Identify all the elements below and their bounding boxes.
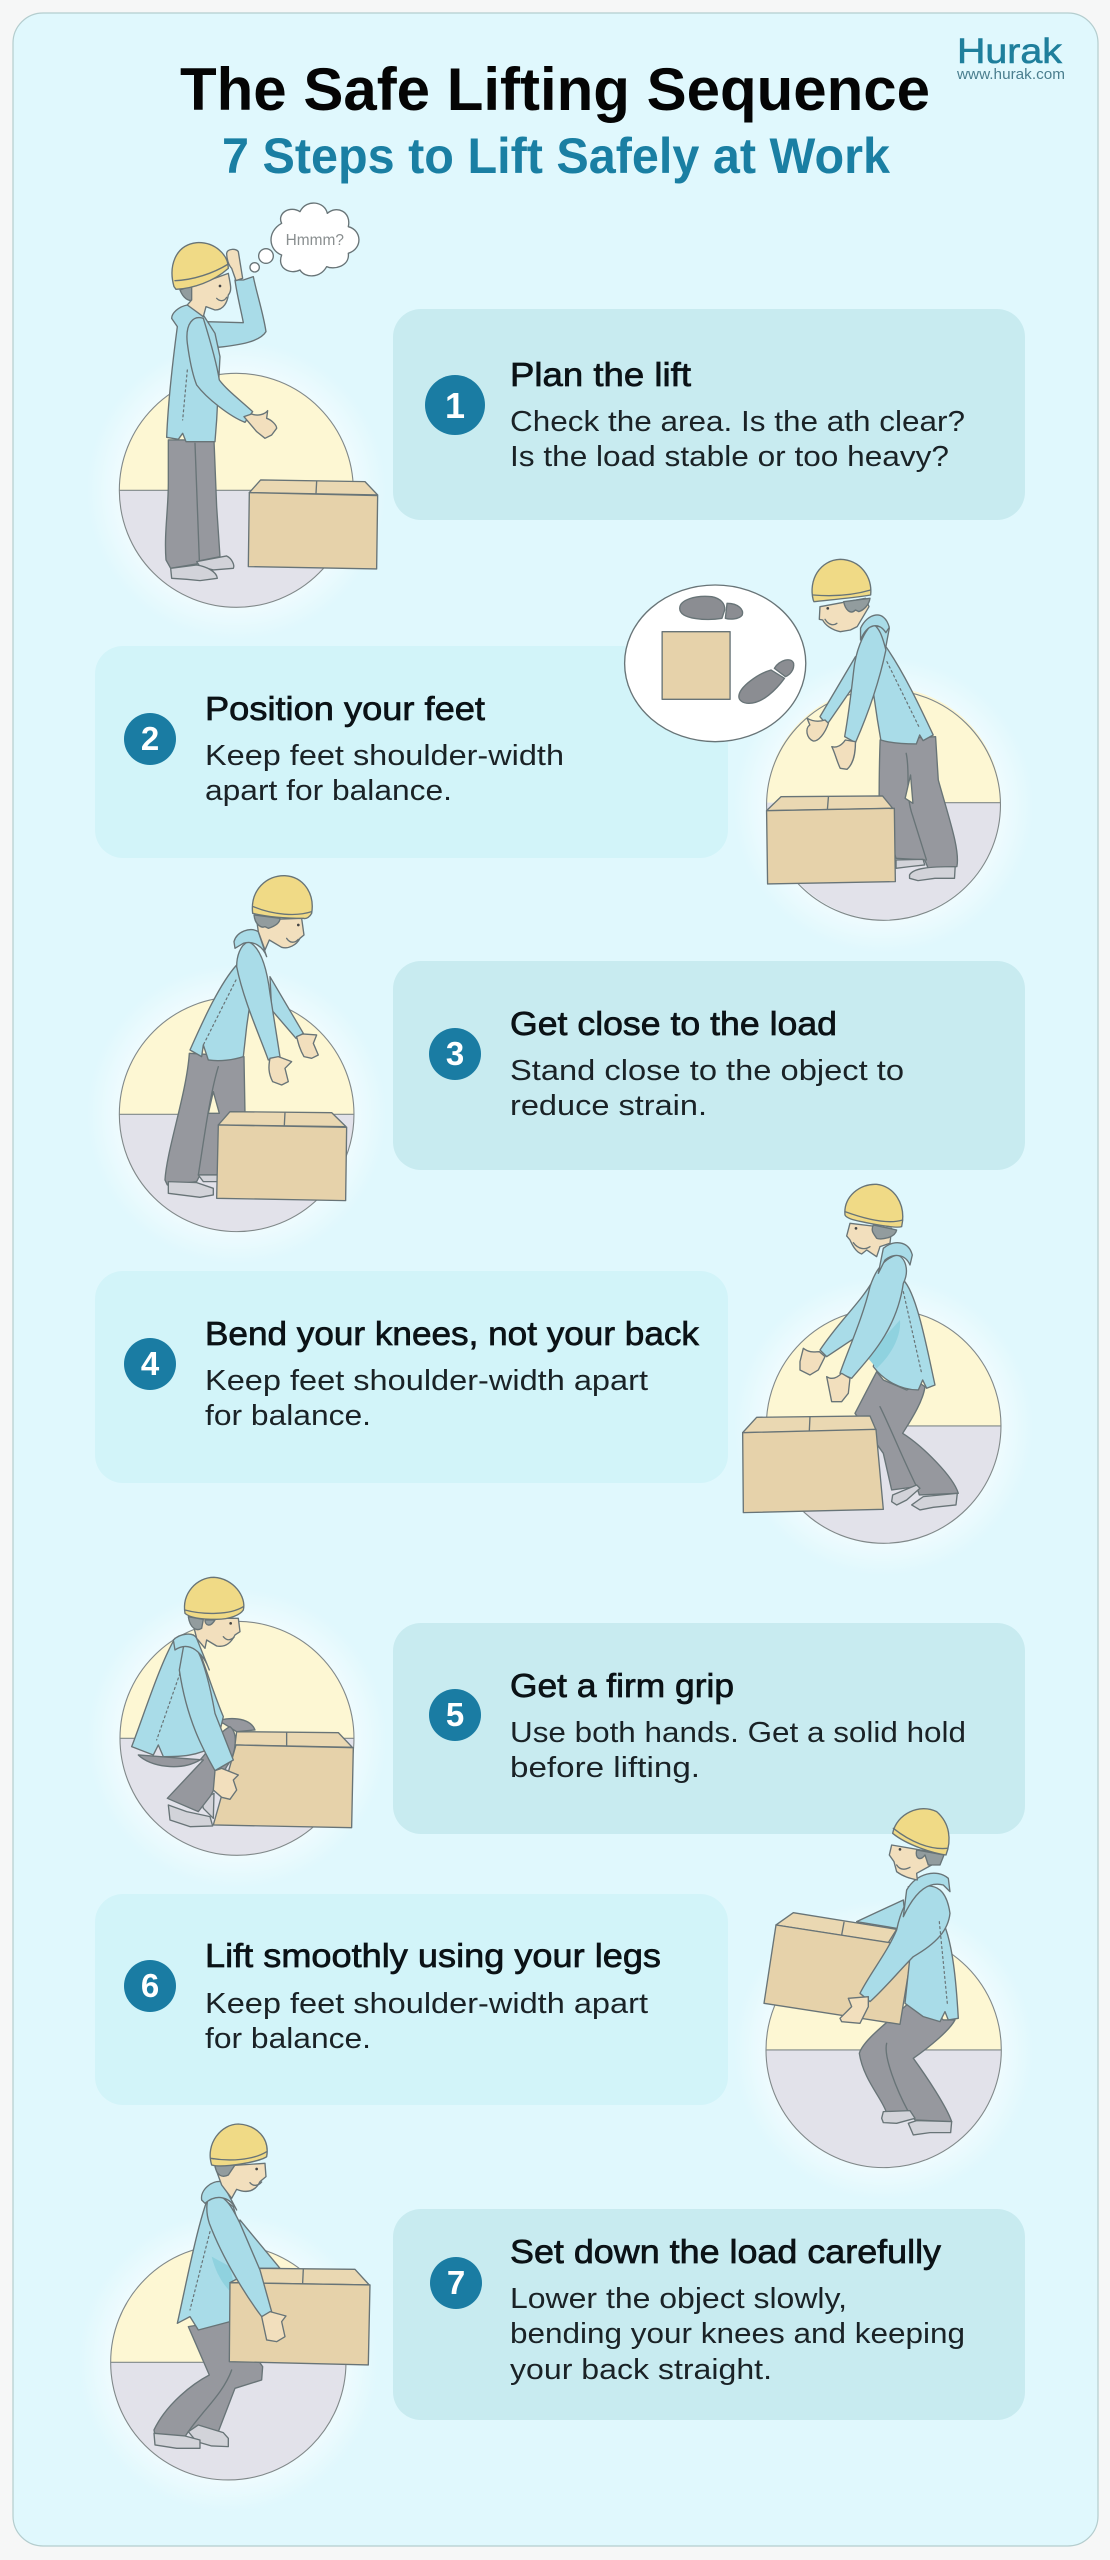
worker upper body step 6 <box>840 1809 958 2023</box>
description: step 7: bending your knees and keeping <box>510 2318 965 2350</box>
worker upper body step 7 <box>190 2124 286 2342</box>
number badge 6 <box>124 1960 176 2012</box>
description: step 3: reduce strain. <box>510 1090 707 1122</box>
heading: plan the lift: Plan the lift <box>510 356 691 393</box>
illustration: step 7 setting down <box>78 2124 378 2512</box>
description: step 7: Lower the object slowly, <box>510 2283 847 2315</box>
worker lower body step 6 <box>857 1900 955 2135</box>
number badge 4 <box>124 1338 176 1390</box>
heading: lift smoothly: Lift smoothly using your legs <box>205 1937 661 1974</box>
description: step 1 <box>510 406 965 473</box>
box step 5 <box>213 1732 353 1828</box>
logo: Hurak <box>956 32 1065 83</box>
subtitle: 7 Steps to Lift Safely at Work <box>222 128 890 184</box>
number badge 3: 3 <box>446 1035 464 1072</box>
description: step 4 <box>205 1365 648 1432</box>
thought bubble: Hmmm?: Hmmm? <box>286 232 344 249</box>
scene circle step 6 <box>766 1932 1001 2168</box>
panel: step 3 card <box>393 961 1025 1170</box>
heading: set down: Set down the load carefully <box>510 2233 942 2270</box>
worker figure step 2 <box>807 559 957 881</box>
worker lower body step 5 <box>138 1719 255 1827</box>
description: step 2: apart for balance. <box>205 775 452 807</box>
illustration: step 6 lifting with legs <box>734 1809 1034 2200</box>
scene circle step 4 <box>766 1309 1001 1543</box>
scene circle step 3 <box>119 997 354 1232</box>
number badge 2: 2 <box>141 720 159 757</box>
description: step 3: Stand close to the object to <box>510 1055 904 1087</box>
panel: step 1 card <box>393 309 1025 520</box>
heading: position your feet: Position your feet <box>205 690 485 727</box>
scene circle step 2 <box>767 687 1001 920</box>
thought bubble: Hmmm? <box>250 203 359 276</box>
number badge 5 <box>429 1689 481 1741</box>
description: step 3 <box>510 1055 904 1122</box>
number badge 6: 6 <box>141 1967 159 2004</box>
number badge 1: 1 <box>445 385 465 426</box>
worker lower body step 7 <box>154 2190 280 2448</box>
description: step 5: before lifting. <box>510 1752 700 1784</box>
panel: step 7 card <box>393 2209 1025 2420</box>
panel: step 5 card <box>393 1623 1025 1834</box>
panel: step 6 card <box>95 1894 728 2105</box>
illustration: step 3 getting close <box>87 876 387 1264</box>
description: step 7: your back straight. <box>510 2354 772 2386</box>
description: step 6 <box>205 1988 648 2055</box>
description: step 2: Keep feet shoulder-width <box>205 740 564 772</box>
worker upper body step 5 <box>132 1577 244 1799</box>
number badge 1 <box>425 375 485 435</box>
scene circle step 1 <box>119 373 353 607</box>
logo: Hurak: www.hurak.com <box>956 66 1065 83</box>
description: step 6: for balance. <box>205 2023 371 2055</box>
number badge 5: 5 <box>446 1696 464 1733</box>
illustration: step 4 bending knees <box>734 1184 1034 1576</box>
description: step 6: Keep feet shoulder-width apart <box>205 1988 648 2020</box>
description: step 7 <box>510 2283 965 2386</box>
number badge 4: 4 <box>141 1345 160 1382</box>
box step 2 <box>767 796 895 884</box>
heading: get a firm grip: Get a firm grip <box>510 1667 734 1704</box>
description: step 1: Check the area. Is the ath clear? <box>510 406 965 438</box>
description: step 5 <box>510 1717 966 1784</box>
box step 4 <box>743 1416 883 1513</box>
box step 3 <box>217 1112 347 1201</box>
illustration: step 2 positioning feet <box>625 559 1034 953</box>
heading: get close: Get close to the load <box>510 1005 837 1042</box>
worker figure step 1 <box>165 243 277 581</box>
logo: Hurak: Hurak <box>957 32 1063 71</box>
number badge 3 <box>429 1028 481 1080</box>
panel: step 2 card <box>95 646 728 858</box>
number badge 2 <box>124 713 176 765</box>
description: step 4: Keep feet shoulder-width apart <box>205 1365 648 1397</box>
title: The Safe Lifting Sequence <box>180 56 930 123</box>
box step 7 <box>229 2268 370 2365</box>
scene circle step 7 <box>111 2245 346 2480</box>
number badge 7: 7 <box>447 2264 465 2301</box>
description: step 5: Use both hands. Get a solid hold <box>510 1717 966 1749</box>
description: step 1: Is the load stable or too heavy? <box>510 441 949 473</box>
footprint diagram bubble <box>625 585 806 742</box>
number badge 7 <box>430 2257 482 2309</box>
illustration: step 5 firm grip <box>87 1577 387 1888</box>
box step 1 <box>248 480 378 569</box>
description: step 2 <box>205 740 564 807</box>
illustration: step 1 planning worker <box>86 203 386 640</box>
heading: bend your knees: Bend your knees, not your back <box>205 1315 700 1352</box>
worker figure step 3 <box>165 876 318 1197</box>
panel: step 4 card <box>95 1271 728 1483</box>
description: step 4: for balance. <box>205 1400 371 1432</box>
scene circle step 5 <box>120 1621 354 1855</box>
box step 6 <box>764 1913 912 2024</box>
worker figure step 4 <box>800 1184 958 1510</box>
